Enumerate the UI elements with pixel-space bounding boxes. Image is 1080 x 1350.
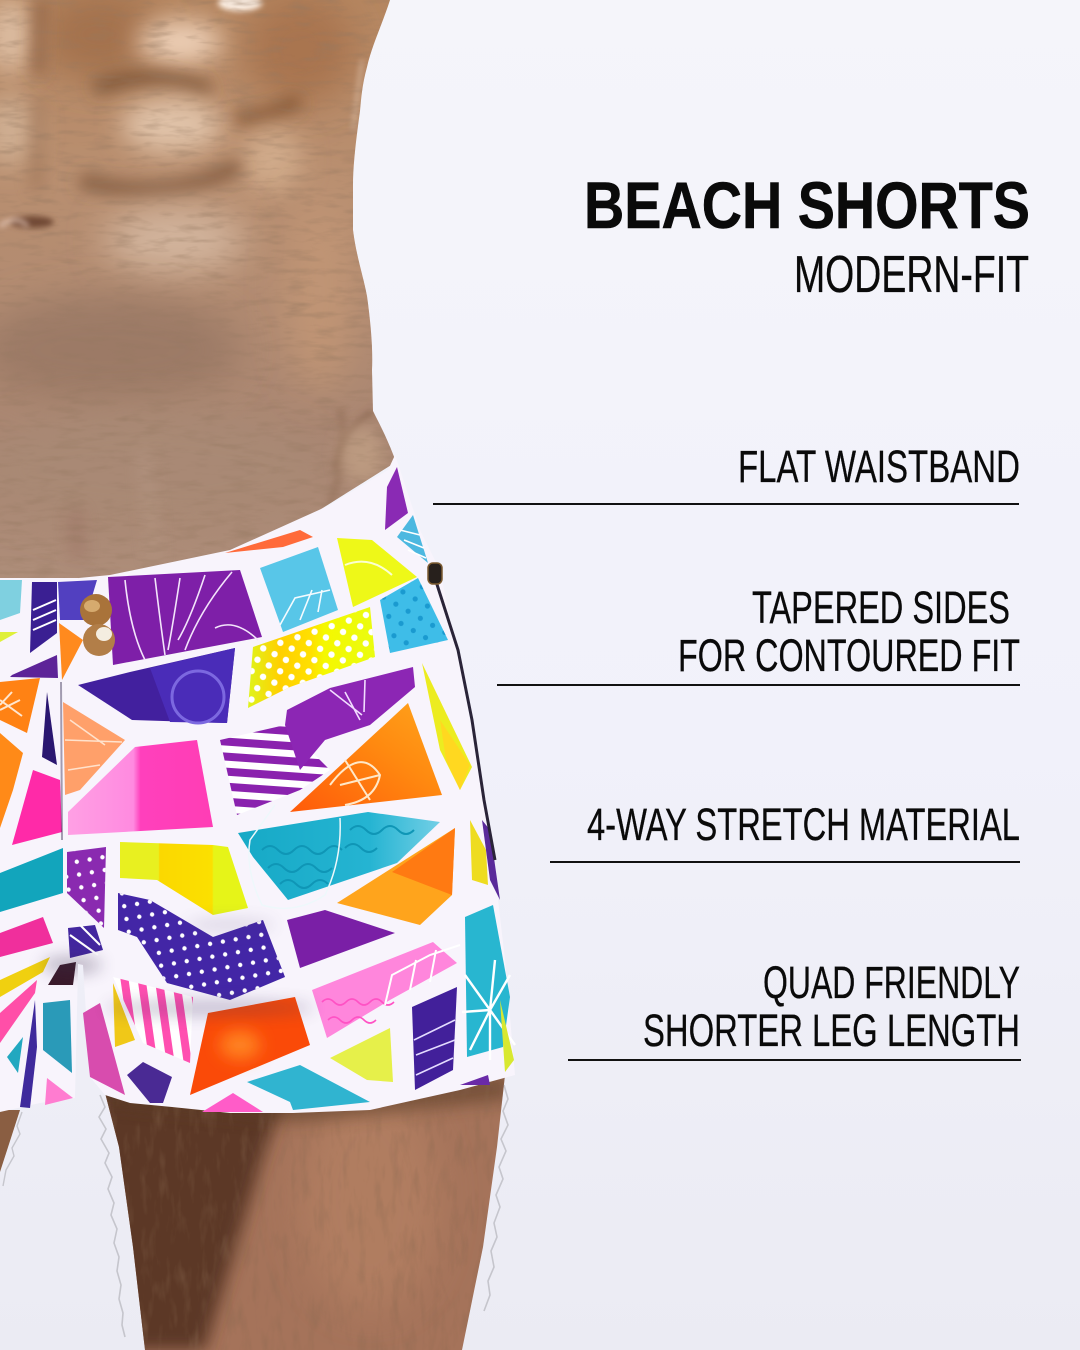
- model torso: [0, 0, 396, 590]
- feature: tapered sides: [497, 582, 1020, 686]
- shorts: [0, 455, 515, 1113]
- print panels: upper body: [0, 607, 472, 845]
- navel: [0, 216, 54, 228]
- print panels: middle: [0, 805, 500, 1043]
- print panels: lower hem: [83, 905, 515, 1112]
- model leg: left thigh: [0, 1110, 22, 1186]
- feature: quad friendly leg length: [568, 957, 1021, 1061]
- body hair texture: [0, 60, 260, 550]
- shorts base: right leg and waistband: [58, 455, 515, 1113]
- title: [584, 168, 1030, 304]
- gold buttons: [80, 594, 115, 656]
- model leg: right thigh: [99, 1075, 510, 1350]
- print panels: left leg: [7, 962, 76, 1108]
- shorts base: left leg: [0, 578, 78, 1112]
- chest and ab shading: [40, 0, 160, 80]
- leg hair fringe: [99, 1085, 508, 1337]
- shorts shading: crotch and hem: [42, 919, 315, 1015]
- side seam with zipper: [428, 563, 495, 860]
- print panels: waistband: [0, 467, 448, 680]
- fly seam: [61, 682, 62, 840]
